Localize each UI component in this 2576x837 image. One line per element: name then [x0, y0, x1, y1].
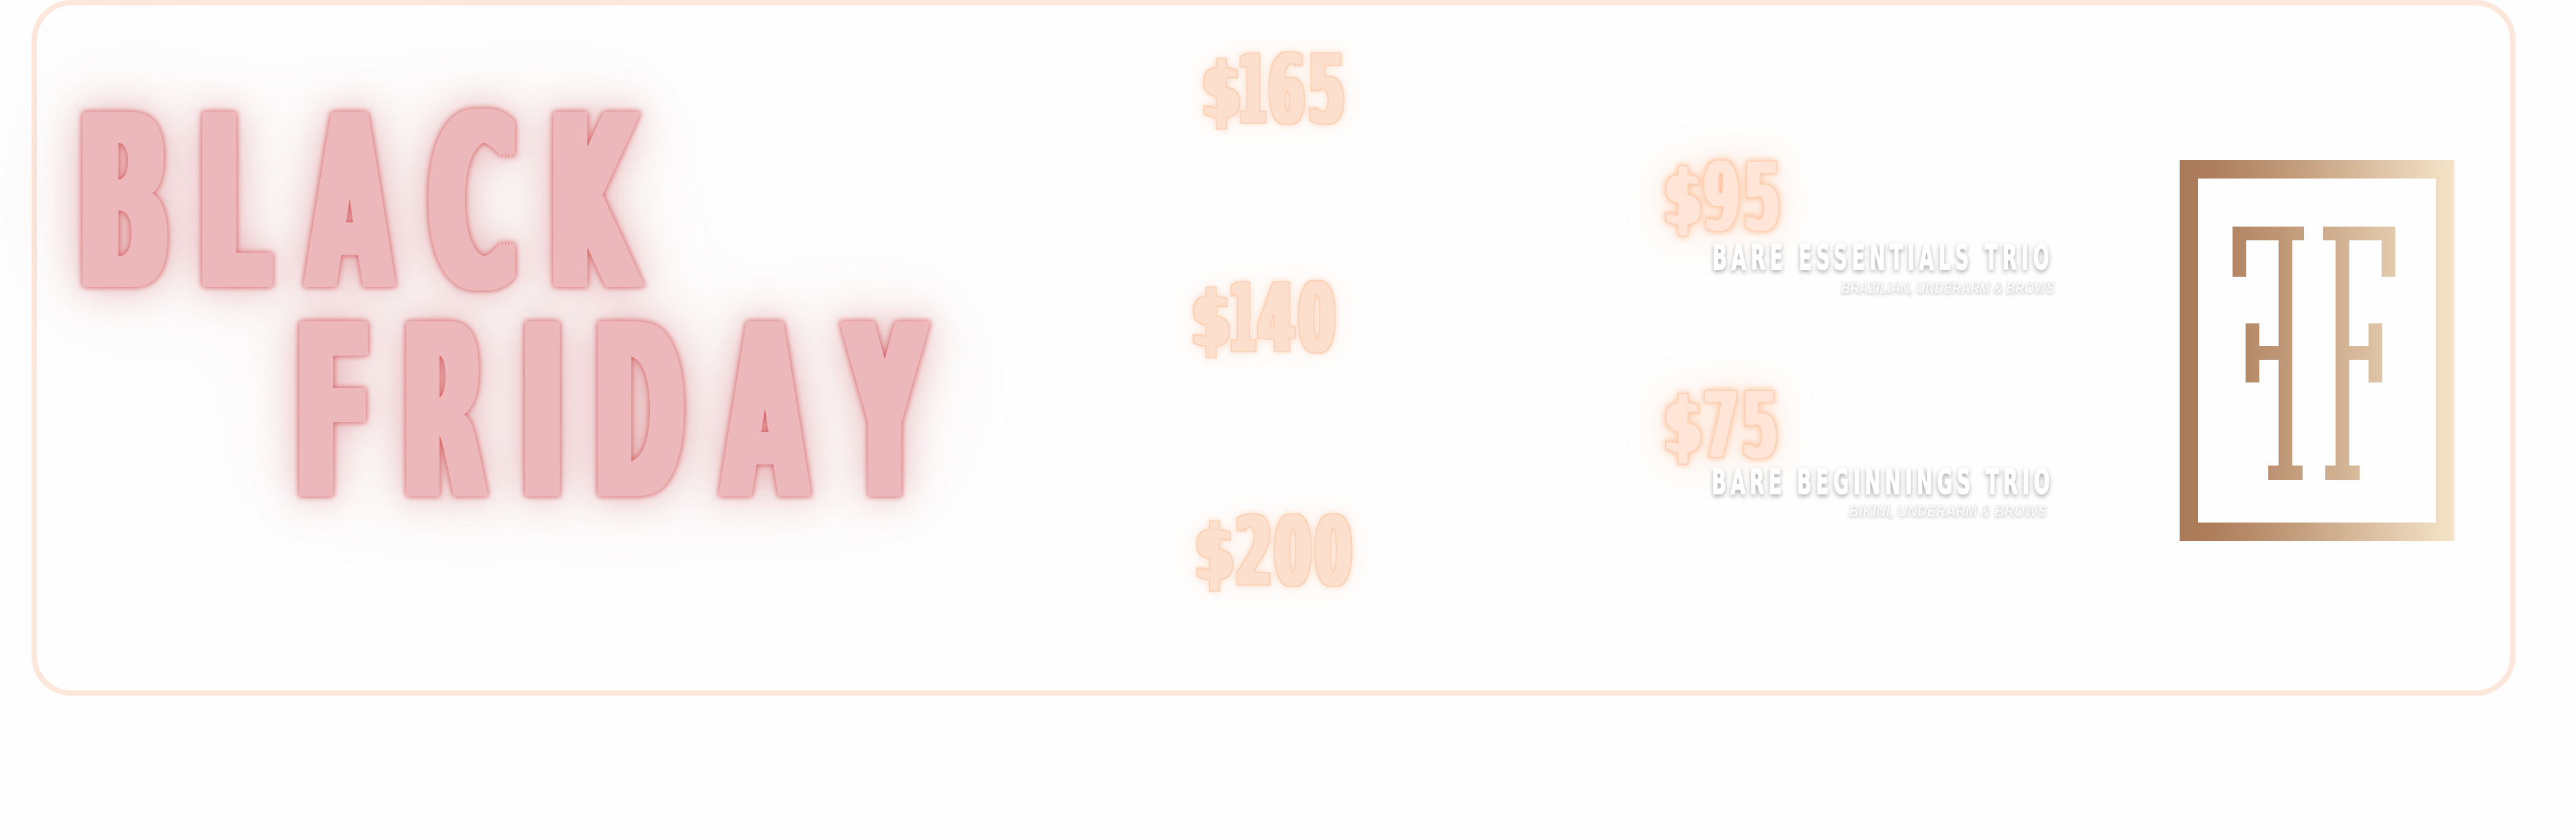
price: $200: 0	[1275, 496, 1311, 609]
price: $75: $	[1664, 381, 1702, 472]
price: $200: $	[1195, 508, 1234, 599]
trio detail: Brazilian, Underarm & Brows: BRAZILIAN, UNDERARM & BROWS	[1841, 279, 2055, 297]
price: $165: 1	[1239, 34, 1266, 147]
heading word: BLACK: B	[78, 65, 169, 345]
faint white script accent	[686, 178, 726, 255]
heading word: BLACK: L	[199, 65, 269, 345]
price: $140: 1	[1230, 262, 1256, 376]
heading word: BLACK: K	[550, 65, 639, 345]
heading word: BLACK	[78, 64, 639, 345]
price: $95	[1664, 142, 1780, 254]
price: $165: 6	[1269, 34, 1304, 147]
price: $95: 5	[1744, 142, 1780, 254]
price: $75: 5	[1743, 371, 1777, 480]
price: $75	[1664, 371, 1777, 481]
heading: BLACK FRIDAY	[78, 64, 924, 554]
price: $75: 7	[1704, 372, 1737, 481]
heading word: FRIDAY: Y	[845, 273, 924, 553]
trio title: Bare Beginnings Trio: BARE BEGINNINGS TRIO	[1712, 463, 2050, 502]
logo left letter	[2233, 227, 2304, 480]
price: $200: 0	[1315, 496, 1351, 609]
rounded panel border	[34, 3, 2513, 693]
price column	[1192, 34, 1351, 609]
heading word: FRIDAY: F	[296, 275, 370, 554]
logo right letter	[2323, 227, 2395, 480]
price: $140	[1192, 262, 1335, 376]
trio title: Bare Essentials Trio: BARE ESSENTIALS TRIO	[1713, 238, 2049, 277]
price: $140: 0	[1299, 262, 1335, 376]
heading word: BLACK: C	[429, 64, 516, 344]
price: $200: 2	[1236, 496, 1272, 609]
heading word: FRIDAY: D	[595, 273, 683, 553]
heading word: BLACK: A	[309, 65, 391, 344]
price: $140: 4	[1258, 262, 1295, 376]
price: $95: 9	[1704, 142, 1739, 254]
heading word: FRIDAY: R	[403, 274, 484, 553]
price: $95: $	[1664, 153, 1702, 244]
logo: TF monogram in gradient frame	[2180, 160, 2454, 541]
logo frame	[2180, 160, 2454, 541]
price: $165: 5	[1309, 34, 1344, 147]
price: $200	[1195, 496, 1351, 609]
heading word: FRIDAY: A	[725, 274, 806, 553]
price: $165	[1202, 34, 1344, 147]
heading word: FRIDAY	[296, 273, 924, 554]
price: $165: $	[1202, 46, 1241, 137]
heading word: FRIDAY: I	[521, 274, 563, 553]
price: $140: $	[1192, 275, 1230, 366]
trio detail: Bikini, Underarm & Brows: BIKINI, UNDERARM & BROWS	[1849, 502, 2047, 520]
